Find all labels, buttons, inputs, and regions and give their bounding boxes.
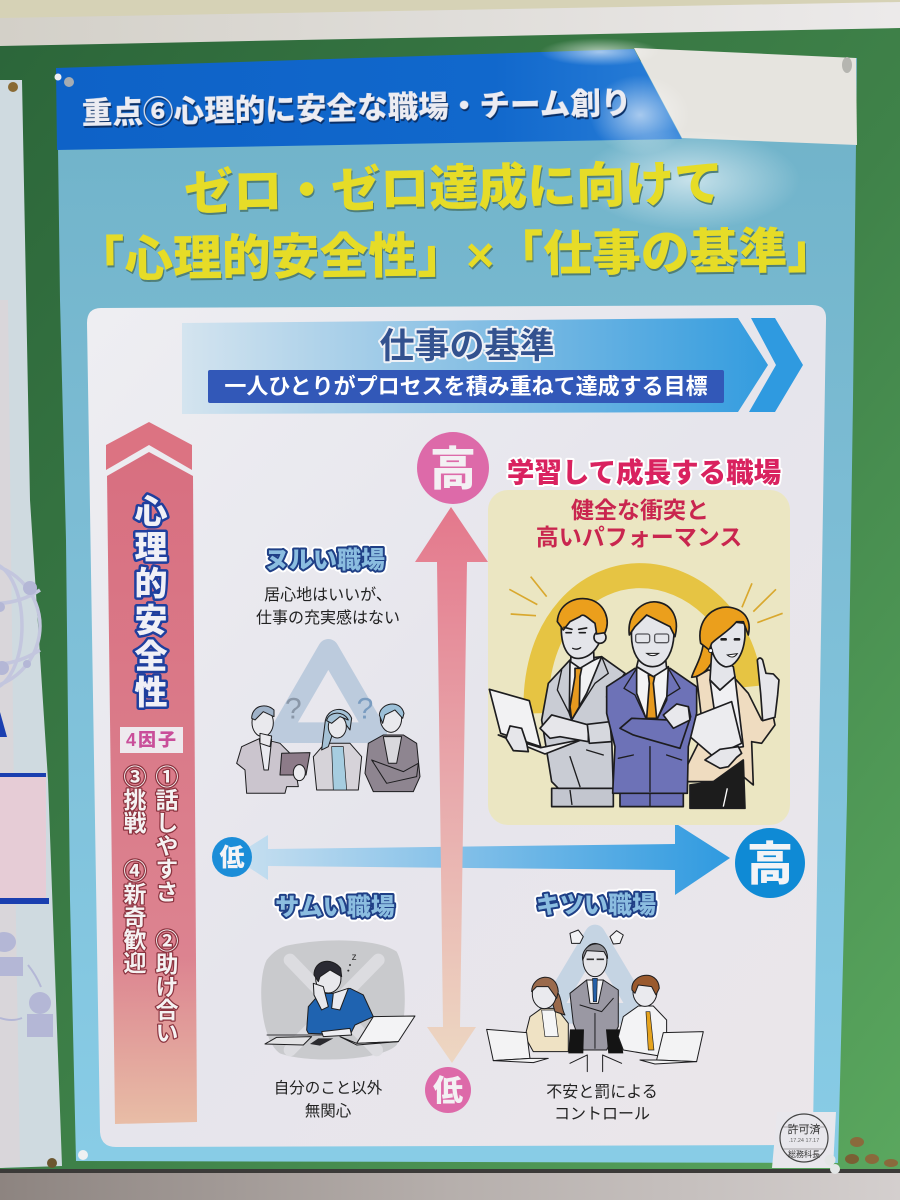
band title: 的 bbox=[134, 565, 168, 602]
main title bbox=[75, 156, 836, 288]
approval stamp sticker bbox=[772, 1112, 836, 1168]
axis label: high (horizontal): 高 bbox=[747, 838, 793, 890]
factor 1: ①話しやすさ bbox=[152, 765, 178, 903]
quadrant heading: キツい職場 bbox=[536, 892, 656, 919]
quadrant heading: サムい職場 bbox=[275, 894, 395, 921]
psychological-safety arrow band bbox=[106, 422, 197, 1124]
illustration: three confident colleagues bbox=[489, 576, 783, 808]
quadrant box bbox=[488, 490, 790, 825]
quadrant heading: 学習して成長する職場 bbox=[507, 457, 781, 488]
axis label: high (vertical): 高 bbox=[430, 443, 476, 495]
woman bbox=[692, 637, 714, 677]
quadrant text bbox=[256, 586, 400, 627]
bottom aluminium frame bbox=[0, 1169, 900, 1200]
quadrant: lukewarm workplace bbox=[237, 547, 420, 793]
axis label: low (horizontal): 低 bbox=[219, 844, 245, 872]
quadrant heading: サムい職場 bbox=[275, 894, 395, 921]
header text: 重点⑥心理的に安全な職場・チーム創り bbox=[81, 86, 632, 131]
factor 2: ②助け合い bbox=[152, 929, 178, 1044]
illustration: dozing man under cross: z bbox=[352, 952, 357, 963]
factor 4: ④新奇歓迎 bbox=[120, 859, 146, 974]
wall above board bbox=[0, 0, 900, 20]
band title: 理 bbox=[134, 529, 168, 566]
top aluminium frame bbox=[0, 2, 900, 46]
chevron bbox=[106, 422, 192, 470]
approval stamp sticker: 許可済 bbox=[788, 1122, 820, 1136]
four factors label bbox=[120, 727, 183, 753]
quadrant heading: ヌルい職場 bbox=[265, 547, 385, 574]
illustration: bored colleagues under triangle bbox=[237, 649, 420, 793]
band subtitle: 一人ひとりがプロセスを積み重ねて達成する目標 bbox=[224, 374, 708, 399]
illustration: dozing man under cross bbox=[261, 940, 415, 1060]
illustration: angry boss behind staff bbox=[487, 930, 703, 1072]
quadrant text: 高いパフォーマンス bbox=[536, 524, 742, 550]
quadrant text: 健全な衝突と bbox=[571, 497, 709, 523]
band title: 安 bbox=[134, 602, 168, 639]
work-standard arrow band bbox=[182, 318, 803, 414]
centre man bbox=[620, 792, 683, 807]
quadrant: learning workplace bbox=[488, 457, 790, 825]
neighbouring poster on the left bbox=[0, 80, 62, 1168]
quadrant: harsh workplace bbox=[487, 892, 703, 1123]
band title: 性 bbox=[134, 674, 168, 711]
glare on poster bbox=[580, 130, 800, 230]
quadrant text: 無関心 bbox=[305, 1102, 352, 1120]
axis label: high (vertical) bbox=[417, 432, 489, 504]
quadrant text: コントロール bbox=[554, 1106, 650, 1123]
quadrant heading: キツい職場 bbox=[536, 892, 656, 919]
quadrant text bbox=[274, 1079, 383, 1120]
quadrant text: 仕事の充実感はない bbox=[256, 609, 400, 627]
axis label: low (vertical) bbox=[425, 1067, 471, 1113]
factor 3: ③挑戦 bbox=[120, 765, 146, 834]
quadrant text: 居心地はいいが、 bbox=[264, 586, 392, 604]
approval stamp sticker: 総務科長 bbox=[788, 1149, 820, 1159]
quadrant: cold workplace bbox=[261, 894, 415, 1120]
axis label: low (horizontal) bbox=[212, 837, 252, 877]
four factors label: 4因子 bbox=[126, 730, 178, 750]
vertical axis arrow bbox=[415, 507, 488, 1063]
chevron bbox=[749, 318, 803, 412]
quadrant text: 自分のこと以外 bbox=[274, 1079, 383, 1097]
horizontal axis arrow bbox=[233, 823, 730, 895]
illustration: bored colleagues under triangle: ? bbox=[357, 692, 373, 725]
axis label: high (horizontal) bbox=[735, 828, 805, 898]
axis label: low (vertical): 低 bbox=[433, 1075, 463, 1108]
band title bbox=[134, 493, 168, 711]
white content panel bbox=[87, 305, 826, 1147]
approval stamp sticker: .17.24 17.17 bbox=[789, 1138, 819, 1144]
quadrant text: 不安と罰による bbox=[546, 1083, 658, 1101]
band title: 心 bbox=[134, 493, 168, 530]
band title: 仕事の基準 bbox=[379, 327, 555, 366]
poster header band bbox=[56, 38, 857, 155]
main title: 「心理的安全性」×「仕事の基準」 bbox=[75, 224, 836, 288]
quadrant heading: ヌルい職場 bbox=[265, 547, 385, 574]
quadrant text bbox=[536, 497, 742, 550]
quadrant text bbox=[546, 1083, 658, 1123]
left man bbox=[552, 788, 613, 807]
illustration: bored colleagues under triangle: ? bbox=[285, 692, 302, 725]
band title: 全 bbox=[134, 638, 168, 675]
main title: ゼロ・ゼロ達成に向けて bbox=[184, 156, 724, 221]
